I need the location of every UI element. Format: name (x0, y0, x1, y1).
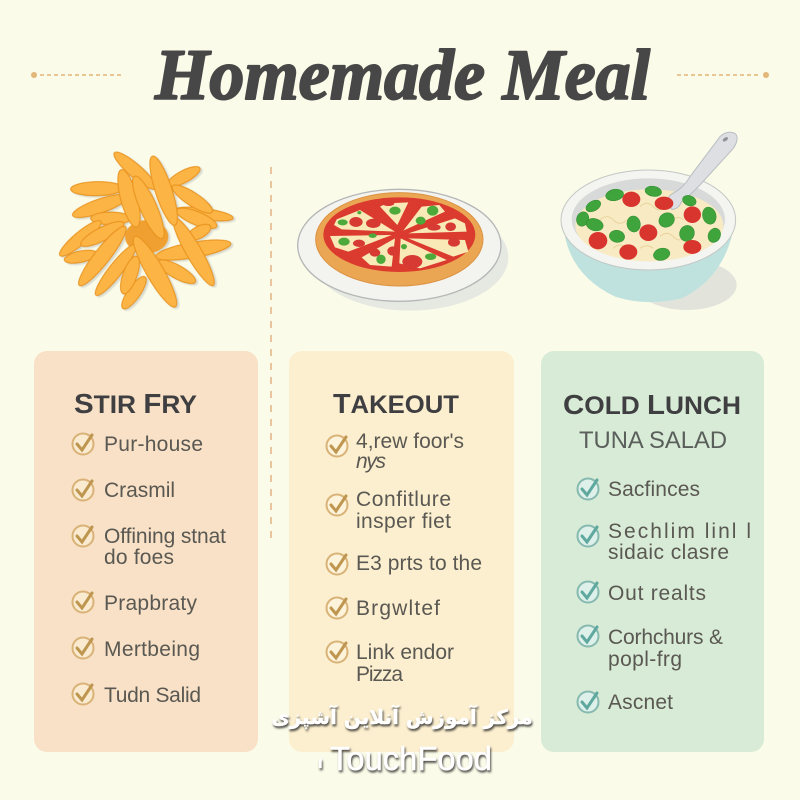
list: cold lunch items: popl-frg (608, 648, 682, 671)
list: takeout items: Link endor (356, 641, 454, 664)
list: stir fry items (72, 433, 226, 707)
list: takeout items: nys (356, 450, 386, 473)
list: takeout items: Brgwltef (356, 597, 440, 620)
title ornament: left (31, 72, 123, 78)
list: stir fry items: Tudn Salid (104, 684, 201, 707)
list: takeout items (326, 430, 482, 686)
list: stir fry items: Crasmil (104, 479, 175, 502)
watermark (271, 704, 533, 777)
illustration: pizza on plate (298, 189, 508, 311)
list: cold lunch items: Corhchurs & (608, 626, 723, 649)
list: takeout items: Pizza (356, 663, 403, 686)
list: stir fry items: Mertbeing (104, 638, 200, 661)
list: stir fry items: Offining stnat (104, 525, 226, 548)
list: cold lunch items: Ascnet (608, 691, 673, 714)
panel: takeout (289, 351, 514, 752)
list: takeout items: 4,rew foor's (356, 430, 464, 453)
list: cold lunch items: Sacfinces (608, 478, 700, 501)
list: takeout items: insper fiet (356, 510, 451, 533)
list: takeout items: Confitlure (356, 488, 451, 511)
list: cold lunch items (578, 478, 751, 714)
title: Homemade Meal (154, 35, 650, 115)
list: cold lunch items: Out realts (608, 582, 706, 605)
illustration: fries (56, 148, 234, 312)
heading: takeout: TAKEOUT (333, 388, 459, 419)
list: stir fry items: do foes (104, 546, 174, 569)
subheading: tuna salad: TUNA SALAD (579, 427, 727, 454)
watermark: مرکز آموزش آنلاین آشپزی (271, 704, 533, 730)
heading: cold lunch: COLD LUNCH (563, 389, 741, 420)
list: stir fry items: Pur-house (104, 433, 203, 456)
list: cold lunch items: Sechlim linl l (608, 520, 751, 543)
watermark: TouchFood (330, 740, 492, 777)
panel: stir fry (34, 351, 258, 752)
panel: cold lunch (541, 351, 764, 752)
list: cold lunch items: sidaic clasre (608, 541, 729, 564)
list: stir fry items: Prapbraty (104, 592, 198, 615)
illustration: salad bowl with spoon (561, 132, 737, 310)
heading: stir fry: STIR FRY (74, 388, 197, 419)
list: takeout items: E3 prts to the (356, 552, 482, 575)
title ornament: right (677, 72, 769, 78)
